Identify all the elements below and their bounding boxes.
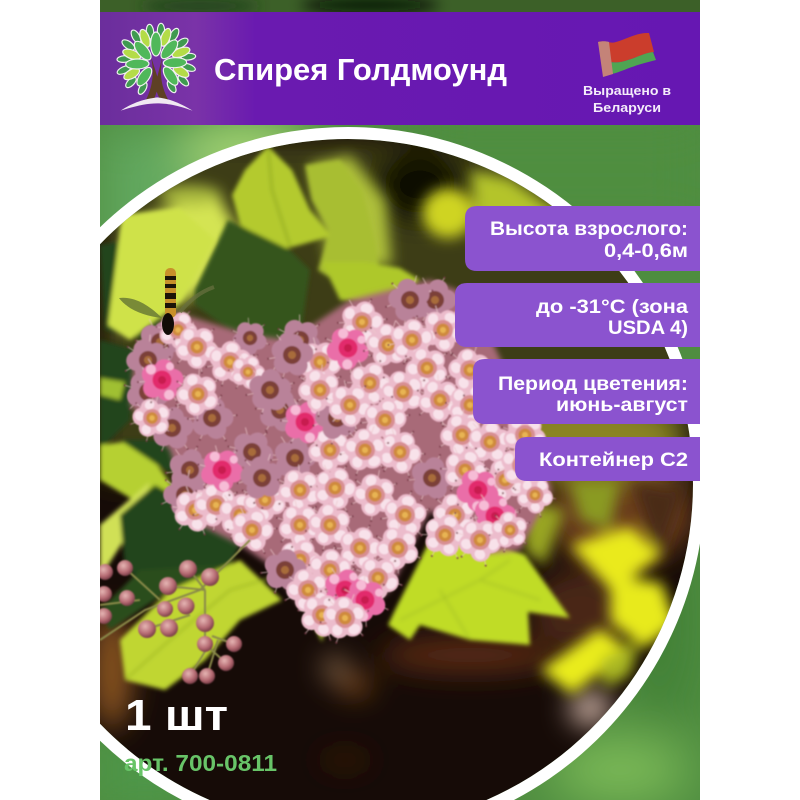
callout: container — [515, 437, 700, 481]
callout: height: Высота взрослого: — [490, 219, 688, 240]
quantity label: 1 шт — [125, 691, 228, 740]
icon: Belarus flag — [598, 33, 656, 77]
callout: container: Контейнер С2 — [539, 450, 688, 471]
callout: flowering period: Период цветения: — [498, 374, 688, 395]
header banner — [100, 12, 700, 125]
callout: height — [465, 206, 700, 271]
flowers: main cluster — [151, 267, 564, 650]
title: Спирея Голдмоунд — [214, 52, 507, 87]
callout: height: 0,4-0,6м — [604, 241, 688, 262]
callout: frost hardiness — [455, 283, 700, 347]
grown in Belarus text — [583, 84, 671, 115]
callout: flowering period: июнь-август — [556, 395, 688, 416]
callout: frost hardiness: USDA 4) — [608, 318, 688, 339]
blurred dark and brown background — [92, 140, 695, 768]
blurred background leaves — [120, 155, 690, 694]
grown in Belarus text: Выращено в — [583, 84, 671, 98]
hoverfly insect — [119, 268, 214, 335]
logo: tree — [116, 23, 196, 111]
article number: арт. 700-0811 — [124, 750, 277, 776]
flowers: upper left cluster — [123, 310, 270, 452]
sharp leaves and shaded foliage — [100, 146, 570, 690]
page background: blurred green foliage — [100, 0, 700, 800]
callout: flowering period — [473, 359, 700, 424]
flower cluster underlay — [130, 280, 552, 632]
top dark strip — [100, 0, 700, 12]
callout: frost hardiness: до -31°С (зона — [536, 297, 688, 318]
flower buds and stems — [96, 540, 250, 684]
panel: circular plant photograph — [92, 125, 700, 800]
grown in Belarus text: Беларуси — [593, 101, 661, 115]
white circular ring — [100, 127, 700, 800]
